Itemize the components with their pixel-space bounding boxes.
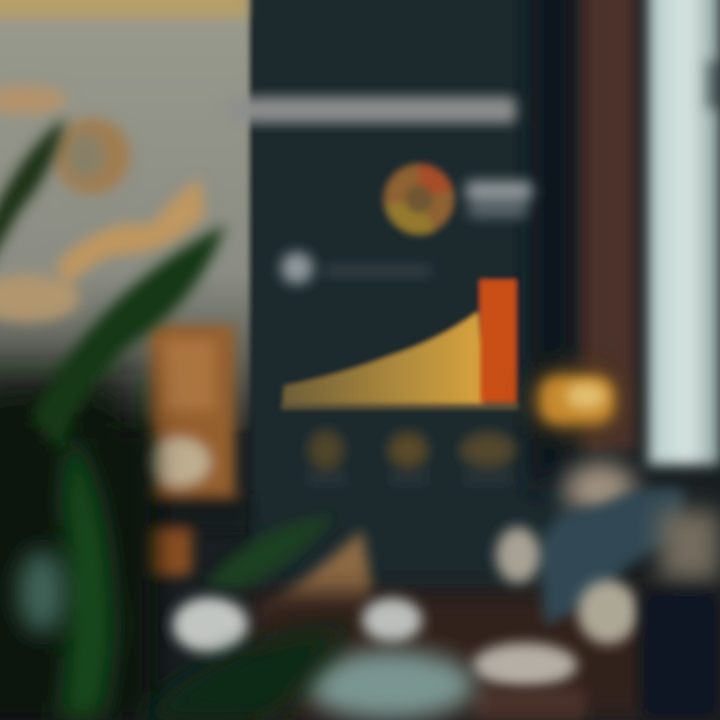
brown wood column — [576, 0, 636, 450]
area chart — [282, 280, 518, 409]
small icon and caption — [281, 252, 430, 284]
ceiling light strip — [0, 0, 248, 18]
dark poster panel — [228, 0, 574, 586]
left poster: flowing shapes — [0, 85, 205, 322]
foreground plant — [0, 118, 350, 720]
bottom furniture and sofa — [172, 462, 720, 720]
tan cushion under poster — [262, 530, 372, 625]
stat text beside donut — [466, 181, 532, 217]
lower poster stat columns — [305, 430, 516, 483]
glowing lamp — [529, 366, 621, 434]
donut chart — [384, 164, 454, 235]
background wall — [0, 0, 250, 430]
left orange panel — [140, 325, 250, 576]
window on the right — [648, 0, 720, 465]
poster heading — [228, 97, 516, 123]
